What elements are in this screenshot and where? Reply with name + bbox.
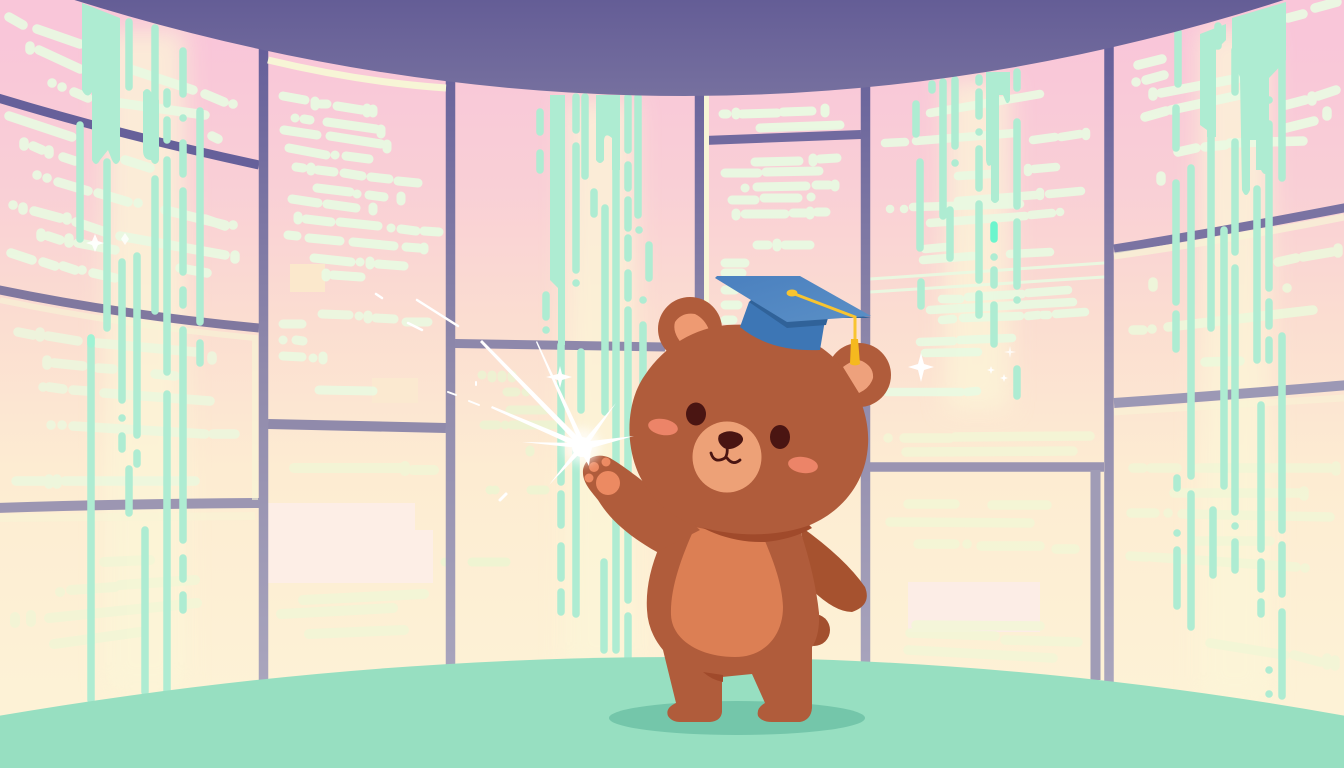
bear head bbox=[629, 325, 868, 534]
cream trim along window edges bbox=[0, 60, 1344, 518]
collar shadow bbox=[678, 505, 812, 542]
soft glow behind falling code bbox=[105, 30, 1270, 700]
magic sparkle from paw bbox=[86, 233, 1016, 500]
falling code rain: centre group bbox=[540, 95, 649, 658]
cap shade bbox=[749, 296, 871, 328]
cap board bbox=[715, 276, 871, 322]
bear bbox=[583, 297, 891, 722]
muzzle bbox=[692, 422, 762, 492]
code lines: right-centre lower windows bbox=[888, 436, 1090, 658]
code lines: far right lower window bbox=[1130, 466, 1336, 666]
falling code rain: far right group bbox=[1176, 2, 1286, 696]
code lines: second window bbox=[283, 96, 439, 277]
bear shadow on floor bbox=[609, 701, 865, 735]
nose bbox=[718, 431, 743, 449]
graduation cap bbox=[715, 276, 871, 366]
ceiling bbox=[68, 0, 1290, 96]
code lines: far right middle window bbox=[1133, 248, 1338, 362]
mouth bbox=[711, 447, 740, 463]
code lines: second window lower lines bbox=[283, 314, 428, 391]
code lines: second window lowest lines bbox=[281, 466, 434, 634]
cheeks bbox=[647, 417, 819, 475]
code lines: far right upper window bbox=[1136, 2, 1337, 181]
floor bbox=[0, 657, 1344, 768]
bear right ear bbox=[827, 343, 891, 407]
bear tail bbox=[798, 614, 830, 646]
bear waving arm bbox=[583, 456, 700, 552]
code lines: right-centre upper window bbox=[870, 94, 1104, 392]
small stars bbox=[86, 233, 1016, 388]
sparkle flying dashes bbox=[376, 294, 506, 500]
sparkle core bbox=[572, 437, 592, 457]
leg shadow bbox=[703, 672, 723, 682]
bear belly bbox=[671, 527, 783, 657]
code lines: upper centre-right small windows bbox=[723, 108, 840, 320]
tassel bbox=[786, 290, 860, 366]
falling code rain: right-centre group bbox=[916, 72, 1017, 396]
bear right arm bbox=[800, 526, 867, 612]
code lines: far left upper windows bbox=[9, 17, 235, 278]
falling code rain: left group bbox=[80, 3, 200, 700]
bear left ear bbox=[658, 297, 722, 361]
paw pads bbox=[584, 458, 620, 495]
eyes bbox=[686, 402, 790, 449]
sparkle glow bbox=[564, 428, 600, 464]
cap base bbox=[740, 302, 825, 350]
bear body and legs bbox=[647, 500, 819, 722]
code lines: far left middle window bbox=[16, 332, 235, 484]
code lines: centre lower window bbox=[445, 375, 555, 562]
code lines: far left lower window bbox=[15, 560, 197, 644]
sparkle long rays bbox=[480, 340, 634, 485]
faint blocks in windows bbox=[268, 264, 1040, 632]
